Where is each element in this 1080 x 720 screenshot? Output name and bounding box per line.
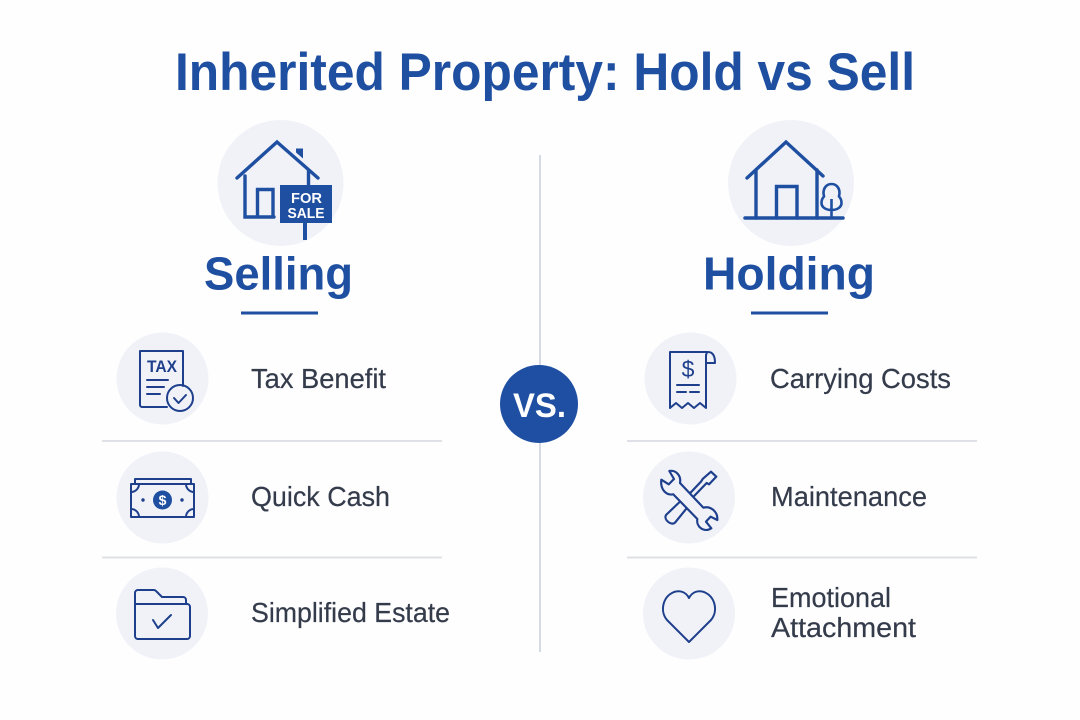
heading: holding: Holding: [703, 248, 875, 300]
icon: house for sale: SALE: [288, 206, 325, 222]
icon: house for sale: [218, 120, 344, 246]
row: maintenance: Maintenance: [771, 481, 927, 512]
row: tax benefit: Tax Benefit: [251, 363, 386, 394]
row: carrying costs: [644, 332, 951, 424]
panel: selling: [102, 120, 450, 660]
row: carrying costs: $: [682, 356, 695, 382]
panel: holding: [627, 120, 977, 660]
row: emotional attachment: [643, 568, 916, 660]
row: tax benefit: [116, 332, 386, 424]
heading: selling: Selling: [204, 248, 353, 300]
icon: crossed wrench and screwdriver: [661, 471, 717, 530]
row: carrying costs: Carrying Costs: [770, 363, 951, 394]
vs badge: VS.: [513, 387, 566, 425]
row: quick cash: [116, 452, 390, 544]
row: tax benefit: TAX: [147, 357, 178, 376]
row: emotional attachment: Attachment: [771, 612, 916, 643]
row: simplified estate: Simplified Estate: [251, 597, 450, 628]
row: simplified estate: [116, 568, 450, 660]
row: quick cash: $: [159, 492, 167, 508]
row: emotional attachment: Emotional: [771, 582, 891, 613]
row: maintenance: [643, 452, 927, 544]
title: Inherited Property: Hold vs Sell: [175, 43, 915, 102]
vs badge: [500, 365, 578, 443]
icon: house with tree: [728, 120, 854, 246]
row: quick cash: Quick Cash: [251, 481, 390, 512]
icon: house for sale: FOR: [291, 191, 323, 207]
